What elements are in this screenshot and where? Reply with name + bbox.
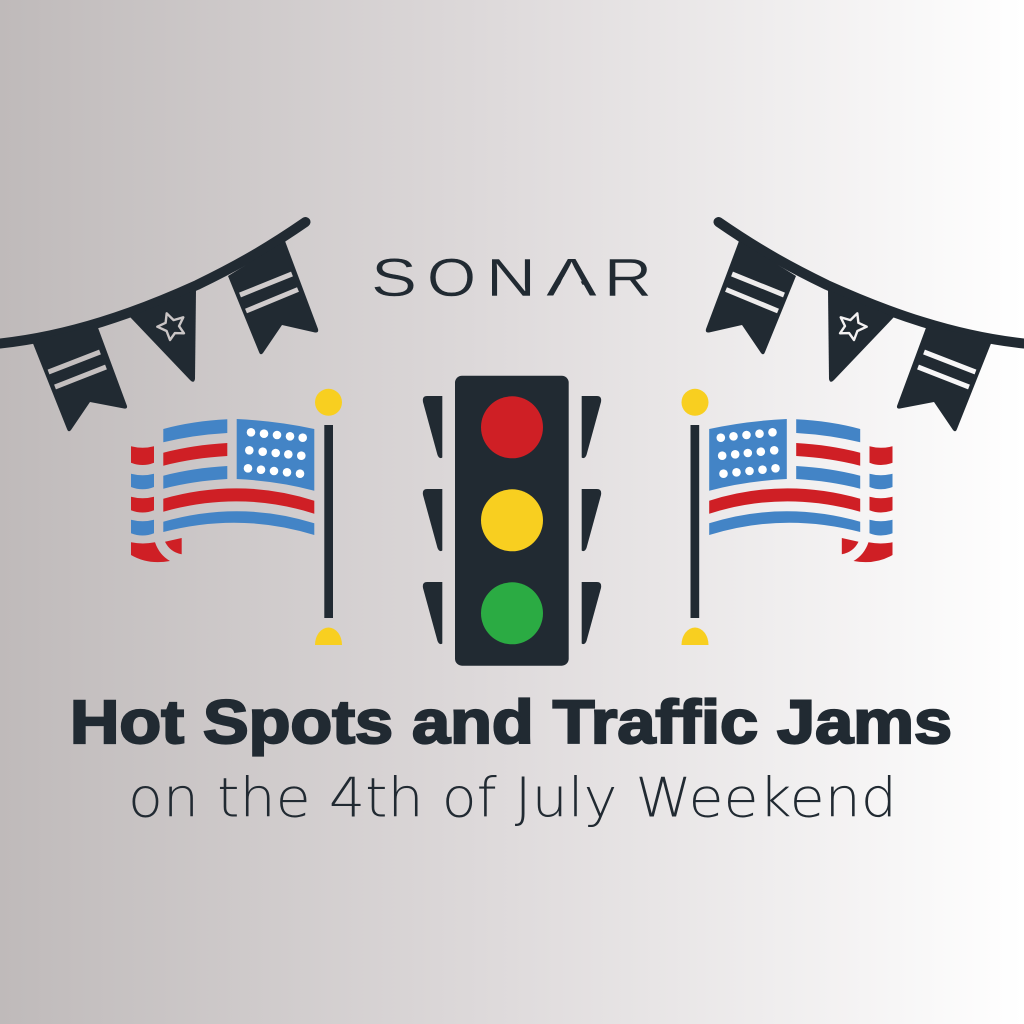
subtitle: on the 4th of July Weekend xyxy=(128,767,897,830)
logo: SONAR: N xyxy=(486,248,536,308)
red light xyxy=(481,396,543,458)
logo: SONAR: A xyxy=(546,248,597,308)
green light xyxy=(481,582,543,644)
pennant: right stripes xyxy=(228,241,318,354)
flag canton xyxy=(237,419,314,491)
bunting: right xyxy=(706,222,1024,431)
traffic light side visors xyxy=(423,396,601,644)
traffic light xyxy=(423,376,601,666)
logo: SONAR: S xyxy=(371,248,417,308)
logo: SONAR xyxy=(371,248,652,308)
flag: right xyxy=(682,389,892,645)
title: Hot Spots and Traffic Jams xyxy=(70,688,952,756)
flag stripes xyxy=(131,419,314,562)
pennant: star xyxy=(130,290,196,382)
bunting: left xyxy=(0,222,318,431)
logo: SONAR: R xyxy=(604,248,652,308)
logo: SONAR: O xyxy=(427,248,476,308)
flag pole xyxy=(315,389,342,645)
pennant: left stripes xyxy=(32,325,127,431)
flag: left xyxy=(131,389,342,645)
yellow light xyxy=(481,489,543,551)
traffic light housing xyxy=(455,376,569,666)
